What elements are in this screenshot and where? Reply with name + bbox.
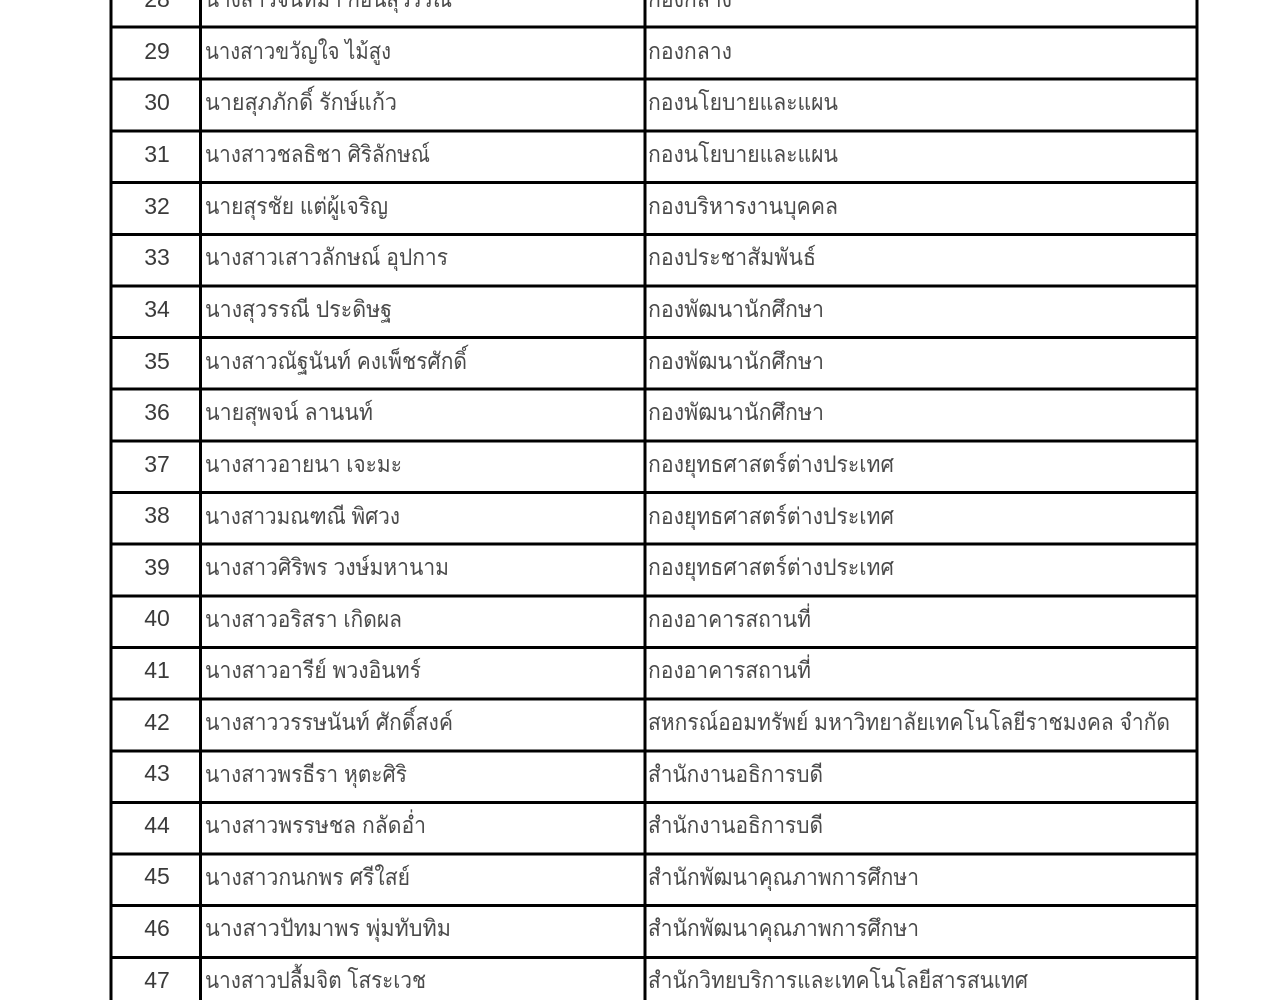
row 43: นางสาวพรธีรา หุตะศิริ <box>205 761 407 788</box>
row 38: กองยุทธศาสตร์ต่างประเทศ <box>648 503 894 530</box>
row 30: กองนโยบายและแผน <box>648 89 838 115</box>
row 42: สหกรณ์ออมทรัพย์ มหาวิทยาลัยเทคโนโลยีราชมงคล จำกัด <box>648 709 1170 735</box>
row 44: นางสาวพรรษชล กลัดอ่ำ <box>205 809 426 838</box>
row 31: นางสาวชลธิชา ศิริลักษณ์ <box>205 141 430 167</box>
row 31: 31 <box>144 141 170 167</box>
row 39: 39 <box>144 554 170 580</box>
row 33 <box>144 244 816 271</box>
row 34: นางสุวรรณี ประดิษฐ <box>205 296 392 323</box>
row 41: กองอาคารสถานที่ <box>648 654 811 683</box>
row 30 <box>144 85 838 116</box>
row 47: 47 <box>144 967 170 993</box>
row 45: 45 <box>144 863 170 889</box>
row 44: สำนักงานอธิการบดี <box>648 812 823 838</box>
row 40: กองอาคารสถานที่ <box>648 603 811 632</box>
row 32: 32 <box>144 193 170 219</box>
row 44: 44 <box>144 812 170 838</box>
row 38: 38 <box>144 502 170 528</box>
row 36 <box>144 399 824 426</box>
row 32: กองบริหารงานบุคคล <box>648 193 838 220</box>
row 39: กองยุทธศาสตร์ต่างประเทศ <box>648 554 894 581</box>
row 40 <box>144 603 811 632</box>
row 45: นางสาวกนกพร ศรีใสย์ <box>205 864 410 890</box>
row 36: 36 <box>144 399 170 425</box>
row 34 <box>144 296 824 323</box>
row 36: กองพัฒนานักศึกษา <box>648 399 824 425</box>
row 28 <box>144 0 732 13</box>
row 38 <box>144 502 894 530</box>
row 37: กองยุทธศาสตร์ต่างประเทศ <box>648 451 894 478</box>
row 29: กองกลาง <box>648 38 732 64</box>
row 29: นางสาวขวัญใจ ไม้สูง <box>205 38 391 65</box>
row 35: นางสาวณัฐนันท์ คงเพ็ชรศักดิ์ <box>205 344 469 375</box>
row 44 <box>144 809 823 838</box>
row 35: 35 <box>144 348 170 374</box>
row 31: กองนโยบายและแผน <box>648 141 838 167</box>
row 33: กองประชาสัมพันธ์ <box>648 244 816 270</box>
row 35: กองพัฒนานักศึกษา <box>648 348 824 374</box>
row 30: นายสุภภักดิ์ รักษ์แก้ว <box>205 85 397 116</box>
row 38: นางสาวมณฑณี พิศวง <box>205 503 400 529</box>
row 32 <box>144 193 838 220</box>
row 29 <box>144 38 732 65</box>
row 45: สำนักพัฒนาคุณภาพการศึกษา <box>648 864 919 891</box>
row 41: นางสาวอารีย์ พวงอินทร์ <box>205 657 421 683</box>
row 46: สำนักพัฒนาคุณภาพการศึกษา <box>648 915 919 942</box>
row 33: 33 <box>144 244 170 270</box>
row 40: 40 <box>144 605 170 631</box>
row 43: สำนักงานอธิการบดี <box>648 761 823 787</box>
row 41: 41 <box>144 657 170 683</box>
row 46: 46 <box>144 915 170 941</box>
row 30: 30 <box>144 89 170 115</box>
row 46 <box>144 915 919 942</box>
row 29: 29 <box>144 38 170 64</box>
row 43: 43 <box>144 760 170 786</box>
row 47 <box>144 964 1028 993</box>
row 32: นายสุรชัย แต่ผู้เจริญ <box>205 193 388 220</box>
row 37 <box>144 451 894 478</box>
row 31 <box>144 141 838 167</box>
row 37: นางสาวอายนา เจะมะ <box>205 451 402 477</box>
row 45 <box>144 863 919 891</box>
row 42: นางสาววรรษนันท์ ศักดิ์สงค์ <box>205 705 453 735</box>
row 43 <box>144 760 823 788</box>
row 39: นางสาวศิริพร วงษ์มหานาม <box>205 554 449 580</box>
row 34: กองพัฒนานักศึกษา <box>648 296 824 322</box>
row 47: สำนักวิทยบริการและเทคโนโลยีสารสนเทศ <box>648 967 1028 993</box>
row 39 <box>144 554 894 581</box>
row 40: นางสาวอริสรา เกิดผล <box>205 606 402 632</box>
row 41 <box>144 654 811 683</box>
row 42 <box>144 705 1170 735</box>
row 46: นางสาวปัทมาพร พุ่มทับทิม <box>205 915 451 942</box>
row 36: นายสุพจน์ ลานนท์ <box>205 399 373 426</box>
row 35 <box>144 344 824 375</box>
row 47: นางสาวปลื้มจิต โสระเวช <box>205 964 426 993</box>
row 34: 34 <box>144 296 170 322</box>
row 42: 42 <box>144 709 170 735</box>
row 33: นางสาวเสาวลักษณ์ อุปการ <box>205 244 448 271</box>
row 37: 37 <box>144 451 170 477</box>
